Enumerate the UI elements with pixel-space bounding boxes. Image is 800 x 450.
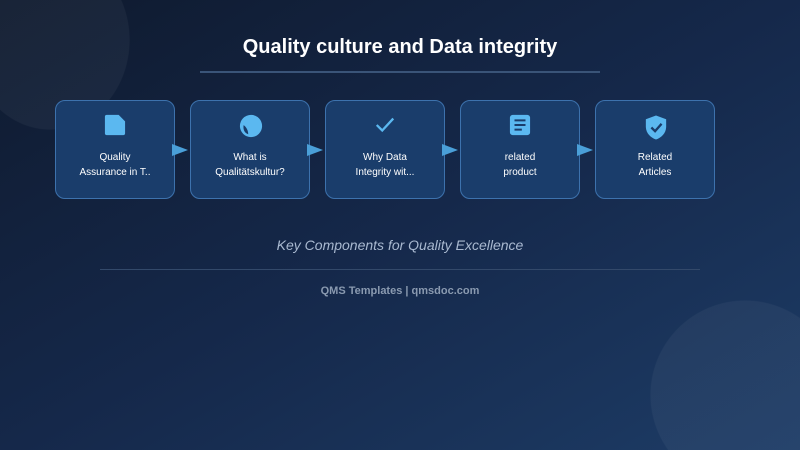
step 5: Articles [639, 167, 671, 178]
step 1: Quality [99, 152, 131, 163]
step 5: Related [638, 152, 672, 163]
footer: QMS Templates | qmsdoc.com [321, 285, 479, 297]
step 2: What is [233, 152, 267, 163]
arrow 3 [442, 144, 458, 156]
step 3 [325, 100, 445, 199]
step 2: Qualitätskultur? [215, 167, 285, 178]
arrow 2 [307, 144, 323, 156]
step 3: Why Data [363, 152, 407, 163]
step 1: Assurance in T.. [80, 167, 150, 178]
step 5 [595, 100, 715, 199]
title: Quality culture and Data integrity [243, 36, 557, 58]
step 4 [460, 100, 580, 199]
step 2 [190, 100, 310, 199]
step 1 [55, 100, 175, 199]
arrow 4 [577, 144, 593, 156]
subtitle: Key Components for Quality Excellence [277, 237, 523, 253]
step 4: product [503, 167, 537, 178]
step 3: Integrity wit... [356, 167, 414, 178]
step 4: related [505, 152, 535, 163]
arrow 1 [172, 144, 188, 156]
